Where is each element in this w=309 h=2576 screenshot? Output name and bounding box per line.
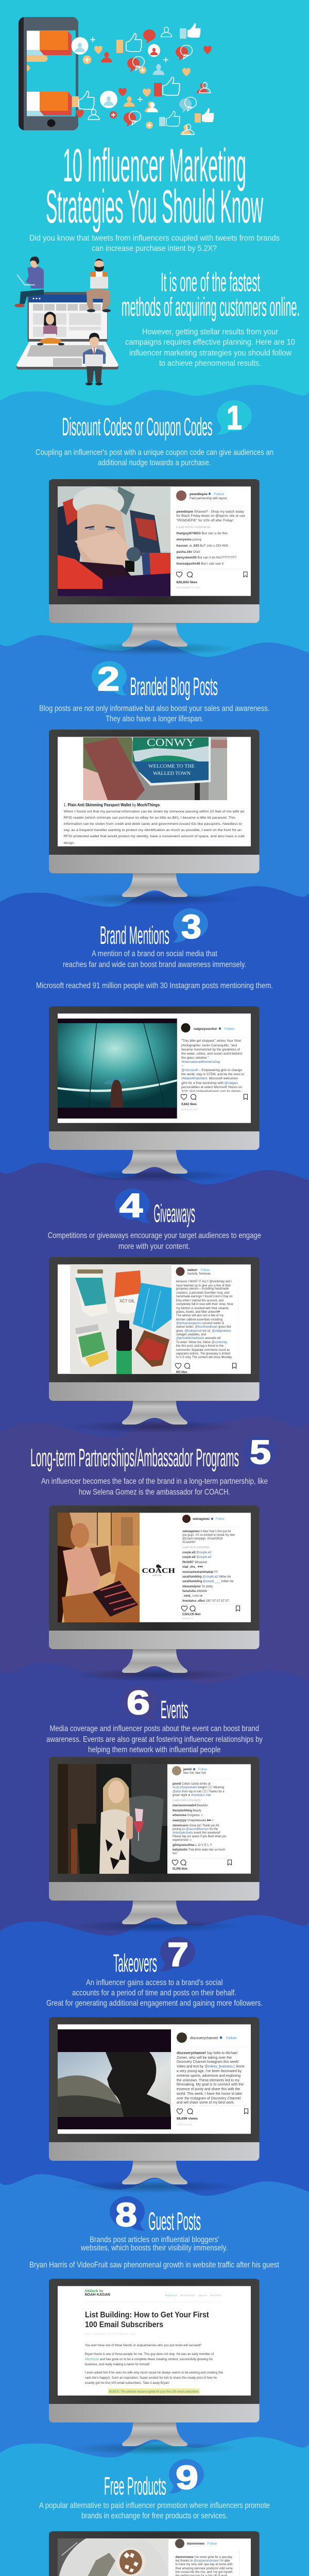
instagram panel: natgeoyourshot: #MakeWhatsNext. Microsoft welcomes — [181, 1077, 238, 1080]
instagram panel: giveaway: @artisanaorganics coconut butter & — [176, 1321, 225, 1325]
blog page header: NOAH KAGAN — [85, 2293, 110, 2297]
instagram panel: discoverychannel: extreme sports, adventure and exploring — [177, 2074, 241, 2078]
heading: brand mentions with number bubble: 3 — [181, 908, 201, 945]
instagram panel: pewdiepie: moryoms pussy — [176, 538, 202, 541]
instagram panel: pewdiepie: pasha.16x Osel — [176, 550, 200, 554]
instagram panel: giveaway: gorgeous pieces— including handmade — [176, 1287, 229, 1291]
monitor: conwy blog post — [49, 730, 260, 906]
instagram panel: discoverychannel: a very young age, I've been fascinated by — [177, 2070, 242, 2073]
instagram panel: selenagomez: fitriti97 Wowww — [182, 1561, 207, 1564]
instagram panel: pewdiepie: for Black Friday deals on @tayroc site or use — [176, 514, 245, 518]
blog article: LAST UPDATED ON OCTOBER 8, 2021 — [85, 2333, 136, 2336]
instagram panel: natgeoyourshot: personalities at select Microsoft Stores on — [181, 1086, 242, 1089]
heading: branded blog posts with number bubble: 2 — [97, 660, 119, 698]
instagram panel: diannnnneee: diannnnneee I've never gone for a spa day, — [176, 2555, 233, 2559]
instagram panel: selenagomez: hana2siita sbbbbbb — [182, 1589, 207, 1593]
blog article: I even asked him if he sees his wife very much cause he always seems to be working and creating (He — [85, 2371, 223, 2375]
instagram panel: discoverychannel: discoverychannel Say hello to Michael — [177, 2052, 237, 2055]
monitor: discovery channel post — [49, 2017, 260, 2193]
instagram panel: pewdiepie: "PEWDIEPIE" for 10% off after Friday! — [176, 519, 233, 522]
instagram panel: discoverychannel: Video and text by @mikey_business | Since — [177, 2065, 245, 2069]
instagram panel: diannnnneee: to have my very own spa day at home with — [176, 2563, 233, 2566]
instagram panel: jannid: #LULUSstylestudio tonight ☐☐ Wearing — [173, 1786, 224, 1789]
blog article: Bryan Harris is one of those people for me. This guy does not stop. He was an early member of — [85, 2352, 214, 2356]
photo: passport wallet and conwy sign: CONWY — [147, 736, 195, 749]
instagram panel: jannid: marciacoronado4 Beautiful — [173, 1804, 208, 1807]
instagram panel: jannid: 51,045 likes — [173, 1867, 187, 1871]
coach logo: ♞ — [154, 1564, 163, 1569]
blog article: business, and really making a name for himself. — [85, 2363, 150, 2366]
instagram panel: natgeoyourshot: girls for a free workshop with @natgeo — [181, 1081, 238, 1085]
blog page header: PODCAST — [165, 2294, 177, 2297]
text: takeovers description: An influencer gains access to a brand's social — [86, 1978, 222, 1987]
instagram panel: natgeoyourshot: 9,842 likes — [181, 1103, 197, 1106]
person: bearded man on top of the laptop — [87, 259, 111, 312]
instagram panel: jannid: @lulus from top to toe! ☐☐ Thanks for a — [173, 1790, 225, 1793]
blog article: List Building: How to Get Your First — [85, 2311, 209, 2319]
photo: pewdiepie with watch — [58, 486, 170, 596]
instagram panel: jannid: joining us @secondfloornyc for the — [172, 1827, 218, 1831]
instagram panel: jannid: Load more comments — [173, 1799, 201, 1802]
text: guest posts description: Brands post articles on influential bloggers' — [90, 2235, 219, 2244]
instagram panel: natgeoyourshot: -- — [181, 1064, 183, 1067]
instagram panel: giveaway: collagen peptides, and — [176, 1333, 206, 1336]
blog page header: UPDATES — [210, 2294, 221, 2297]
instagram panel: jannid: Please tag our space if you liked what you — [173, 1835, 226, 1838]
instagram panel: pewdiepie: 626,843 likes — [176, 581, 197, 584]
instagram panel: pewdiepie: Load more comments — [176, 526, 211, 529]
instagram panel: pewdiepie: daisysteen05 But can it do this???!?!?!?? — [176, 556, 236, 560]
instagram panel: giveaway: to U.S only. The contest will close Monday — [176, 1355, 232, 1359]
instagram panel: discoverychannel — [176, 2032, 249, 2126]
text: takeovers description: Great for generating additional engagement and gaining more followers. — [46, 1999, 263, 2008]
text: discount codes description — [36, 448, 273, 467]
photo: woman at lulus event — [58, 1764, 167, 1874]
instagram panel: selenagomez: selenagomez A New Year's first just for — [182, 1530, 231, 1533]
instagram panel: selenagomez: @Coach campaign. #Coach5518 — [182, 1537, 223, 1540]
instagram panel: diannnnneee — [175, 2539, 239, 2576]
illustration: people on a giant laptop — [14, 257, 118, 385]
panel: strategy 9 free products — [39, 2459, 270, 2576]
text: free products description: brands in exchange for free products or services. — [81, 2512, 228, 2520]
text: events description — [46, 1724, 263, 1754]
instagram panel: giveaway — [175, 1267, 239, 1374]
instagram panel: giveaway: my kitchen is stocked with their ceramic — [176, 1307, 229, 1310]
instagram panel: pewdiepie: thatguy874653 But can u do this — [176, 532, 228, 535]
instagram panel: selenagomez: sarahtumbling @cloudz____ follow me — [182, 1580, 234, 1583]
instagram panel: natgeoyourshot: photographer Justin Carrasquillo, "and — [181, 1044, 237, 1047]
instagram panel: jannid: stevencarro Great pic! Thank you for — [173, 1824, 220, 1827]
instagram panel: discoverychannel: Follow — [226, 2036, 237, 2040]
heading: long-term partnerships with number bubble: 5 — [250, 1433, 271, 1471]
photo: giveaway food products — [70, 1264, 171, 1374]
instagram panel: giveaway: Etsy when I started this account, and — [176, 1299, 224, 1302]
instagram panel: giveaway: @primalkitchenfoods avocado oil! — [176, 1336, 221, 1340]
heading: guest posts with number bubble: 8 — [115, 2196, 137, 2233]
blog article: You ever have one of those friends or acquaintances who you just know will succeed? — [85, 2344, 202, 2347]
blog page header: RESOURCES — [180, 2294, 195, 2297]
instagram panel: giveaway: because I WANT IT ALL!! @cordxclay and I — [176, 1280, 232, 1283]
heading: long-term partnerships with number bubble — [30, 1433, 278, 1472]
text: brand mentions description: reaches far and wide can boost brand awareness immensely. — [63, 960, 246, 969]
text: events description: Media coverage and influencer posts about the event can boost brand — [49, 1724, 259, 1733]
instagram panel: selenagomez: couple.al2 @couple.al2 — [182, 1555, 212, 1559]
instagram panel: pewdiepie: therealjax0n49 But I can see it — [176, 562, 224, 566]
text: planning paragraph: However, getting stellar results from your — [142, 328, 278, 336]
text: giveaways description: more with your content. — [118, 1242, 190, 1251]
instagram panel: discoverychannel: over the Instagram of Discovery Channel — [177, 2097, 241, 2100]
instagram panel: giveaway: have teamed up to give you a few of their — [176, 1284, 231, 1287]
instagram panel: diannnnneee: Follow — [208, 2542, 217, 2546]
blog page header: OkDork — [85, 2290, 98, 2293]
panel: strategy 4 giveaways — [48, 1187, 261, 1433]
instagram panel: diannnnneee: hot cocoa into the mix, and I've got myself — [176, 2570, 232, 2574]
heading: free products with number bubble: 9 — [176, 2459, 198, 2496]
text: planning paragraph: to achieve phenomenal results. — [159, 359, 261, 368]
heading: takeovers with number bubble: Takeovers — [113, 1950, 157, 1977]
text: partnerships description — [41, 1477, 268, 1497]
text: partnerships description: how Selena Gomez is the ambassador for COACH. — [79, 1488, 230, 1497]
heading: free products with number bubble — [104, 2459, 204, 2500]
instagram panel: diannnnneee: their amazing skincare products! Add some — [176, 2567, 233, 2570]
person: man sitting in front — [83, 333, 106, 385]
text: blog posts description — [39, 704, 270, 723]
instagram panel: giveaway: The winner will also win a few of my — [176, 1314, 224, 1317]
instagram panel: selenagomez: noooranheshamkhattab !!!!! — [182, 1570, 218, 1574]
panel: strategy 8 guest posts — [29, 2196, 280, 2455]
blog article text: information can be stolen from credit and debit cards and government-issued IDs like passports. Needless to — [64, 822, 242, 826]
coach logo: NEW YORK — [152, 1574, 163, 1577]
instagram panel: giveaway: To enter: follow me, follow @cordxclay, — [176, 1341, 228, 1344]
instagram panel: giveaway: Nashville, Tennessee — [187, 1272, 211, 1276]
text: brand mentions description: A mention of a brand on social media that — [92, 950, 218, 958]
heading: takeovers with number bubble — [113, 1936, 195, 1977]
heading: giveaways with number bubble — [115, 1187, 195, 1228]
panel: strategy 7 takeovers — [46, 1936, 263, 2193]
blog article: Monthly1k and has gone on to be a complete beast creating content, successfully growing his — [85, 2358, 213, 2361]
instagram panel: natgeoyourshot: MARCH 8, 2017 — [181, 1108, 198, 1111]
blog article text: 1. Plain Anti Skimming Passport Wallet by MochiThings: — [64, 803, 161, 807]
instagram panel: jannid: glimpsesofme L O V E L Y — [173, 1843, 213, 1847]
text: discount codes description: Coupling an influencer's post with a unique coupon code can give audiences an — [36, 448, 273, 457]
instagram panel: selenagomez: nikasaneipour So pretty . — [182, 1585, 214, 1588]
instagram panel: giveaway: coasters, a porcelain thumbler mug, and — [176, 1291, 229, 1295]
panel: strategy 5 long-term partnerships — [30, 1433, 278, 1682]
blog page header: by — [99, 2290, 104, 2293]
monitor: giveaway instagram post — [49, 1257, 260, 1433]
panel: strategy 6 events — [46, 1684, 263, 1933]
blog article text: RFID reader (which criminals can purchase on eBay for as little as $8!), I became a little bit paranoid. This — [64, 816, 235, 820]
instagram panel: giveaway: plates, bowls, and fiber artwork♥ — [176, 1310, 220, 1314]
photo: skincare on marble tray — [58, 2538, 168, 2576]
text: events description: awareness. Events are also great at fostering influencer relationships by — [46, 1735, 263, 1744]
panel: strategy 4 giveaways: Giveaways — [153, 1200, 195, 1228]
instagram panel: jannid: #lulustylestudio event this weekend! — [173, 1831, 220, 1835]
instagram panel: natgeoyourshot: natgeoyourshot — [194, 1027, 217, 1031]
instagram panel: discoverychannel: the unknown. These elements led to my — [177, 2079, 239, 2082]
blog article text: RFID protected wallet that would protect my identity, have a convenient amount of space, and also have a cute — [64, 835, 245, 838]
text: free products description — [39, 2501, 270, 2520]
instagram panel: pewdiepie — [176, 490, 247, 589]
instagram panel: selenagomez: JANUARY 2 — [182, 1617, 193, 1620]
instagram panel: pewdiepie: pewdiepie — [190, 493, 208, 496]
icons: likes, hearts, followers and comments — [71, 23, 214, 135]
instagram panel: jannid: fun! — [173, 1852, 177, 1855]
heading: discount codes with number bubble: 1 — [227, 399, 242, 436]
instagram panel: discoverychannel: Zomer, who will be taking over the — [177, 2056, 232, 2060]
intro text: Did you know that tweets from influencers coupled with tweets from brands — [29, 234, 280, 243]
heading: events with number bubble: 6 — [127, 1684, 150, 1721]
photo: passport wallet and conwy sign: WALLED TOWN — [153, 771, 191, 776]
instagram panel: selenagomez: selenagomez — [193, 1517, 210, 1521]
instagram panel: giveaway: comments! Separate comments count as — [176, 1348, 230, 1352]
instagram panel: jannid: great night ● #lovelulus #ad — [173, 1793, 211, 1797]
text: partnerships description: An influencer becomes the face of the brand in a long-term partnership, like — [41, 1477, 268, 1486]
blog article: exactly got his first 100 email subscribers. Take it away Bryan! — [85, 2381, 169, 2385]
blog article text: say, as a frequent traveller wanting to protect my identification as much as possible, I went on the hunt for an — [64, 828, 242, 832]
instagram panel: giveaway: like this post, and tag a friend in the — [176, 1344, 224, 1348]
blog article text: When I found out that my personal information can be stolen by someone passing within 10 feet of me with an — [64, 810, 245, 814]
coach logo — [142, 1564, 175, 1577]
instagram panel: discoverychannel: 7 DAYS AGO — [177, 2123, 192, 2126]
instagram panel: selenagomez: Load more comments — [182, 1546, 210, 1549]
instagram panel: jannid: saazyyyy Очаровашка ♣♣☺ — [173, 1819, 214, 1822]
blog page header — [85, 2290, 222, 2302]
instagram panel: jannid: Follow — [198, 1768, 207, 1771]
illustration: phone with social icons — [19, 17, 214, 135]
instagram panel: natgeoyourshot: became mesmerized by the greatness of — [181, 1048, 240, 1052]
instagram panel: jannid: thestylishthing Beauty — [173, 1809, 202, 1812]
instagram panel: pewdiepie: NOVEMBER 24, 2017 — [176, 586, 200, 589]
text: blog posts description: They also have a longer lifespan. — [106, 715, 203, 723]
instagram panel: giveaway: Follow — [201, 1268, 210, 1272]
photo: giveaway food products: XCT OIL — [119, 1299, 135, 1303]
person: man with laptop on the left — [14, 257, 44, 307]
instagram panel: selenagomez: fenerbahce_effect 1907 GT GT GT GT — [182, 1599, 229, 1603]
text: free products description: A popular alternative to paid influencer promotion where influencers promote — [39, 2501, 270, 2510]
instagram panel: selenagomez: _vanq_ Love u♦ — [182, 1594, 203, 1598]
text: guest posts description: websites, which boosts their visibility immensely. — [80, 2244, 228, 2252]
instagram panel: giveaway: completely fell in love with their shop. Now — [176, 1302, 233, 1306]
blog article text — [64, 803, 245, 845]
instagram panel: diannnnneee: diannnnneee — [187, 2542, 204, 2546]
instagram panel: selenagomez — [181, 1515, 240, 1620]
instagram panel: giveaway: kitchen cabinet essentials including — [176, 1318, 222, 1321]
heading: events with number bubble — [122, 1684, 188, 1724]
instagram panel: jannid: jannid Cotton candy drinks at — [172, 1782, 211, 1786]
text: brand mentions description — [36, 950, 273, 990]
instagram panel: natgeoyourshot: @microsoft – Empowering girls to change — [181, 1069, 242, 1072]
instagram panel: natgeoyourshot: "This little girl stopped," writes Your Shot — [181, 1039, 241, 1043]
instagram panel: selenagomez: 5,024,135 likes — [182, 1613, 201, 1616]
instagram panel: jannid — [172, 1766, 232, 1871]
instagram panel: jannid: New York, New York — [183, 1771, 207, 1775]
panel: strategy 3 brand mentions — [36, 908, 273, 1182]
instagram panel: discoverychannel: discoverychannel — [190, 2036, 218, 2040]
monitor: selena gomez coach post — [49, 1505, 260, 1682]
blog article: said she's happy!). Such an inspiration. Super excited for him to share this meaty post of how he — [85, 2376, 217, 2380]
instagram panel: jannid: jannid — [183, 1768, 192, 1771]
instagram panel: natgeoyourshot: the glass window." — [181, 1056, 209, 1060]
instagram panel: pewdiepie: pewdiepie Shaved? - Shop my watch today — [176, 510, 245, 514]
instagram panel: selenagomez: couple.al2 @couple.al2 — [182, 1551, 212, 1554]
blog article: BONUS: The ultimate resource guide for your first 100 email subscribers — [109, 2390, 199, 2394]
text: planning paragraph: influencer marketing strategies you should follow — [129, 349, 292, 358]
instagram panel: pewdiepie: Paid partnership with tayroc — [190, 497, 228, 500]
instagram panel: diannnnneee: but thanks to @copperandcrane I'm able — [176, 2559, 230, 2563]
photo: selena gomez with coach bag — [58, 1513, 140, 1622]
instagram panel: giveaway: walnut butter, @fourthandheart grass-fed — [176, 1325, 231, 1329]
heading: takeovers with number bubble: 7 — [167, 1936, 188, 1973]
text: planning paragraph: campaigns requires effective planning. Here are 10 — [125, 338, 295, 347]
photo: boy silhouette at sunset — [58, 2029, 171, 2129]
monitor: pewdiepie instagram post — [49, 479, 260, 655]
blog page header: ABOUT — [198, 2294, 207, 2297]
laptop — [16, 292, 118, 369]
instagram panel: giveaway: separates entries. The giveaway is limited — [176, 1352, 230, 1355]
instagram panel: pewdiepie: Follow — [214, 493, 224, 496]
text: events description: helping them network with influential people — [88, 1745, 221, 1754]
heading: discount codes with number bubble — [62, 399, 252, 441]
text: blog posts description: Blog posts are not only informative but also boost your sales and awareness. — [39, 704, 270, 713]
text: takeovers description — [46, 1978, 263, 2008]
panel: strategy 8 guest posts: Guest Posts — [148, 2208, 201, 2235]
text: guest posts description — [29, 2235, 280, 2269]
heading: brand mentions with number bubble — [100, 908, 208, 950]
blog article: 100 Email Subscribers — [85, 2320, 163, 2329]
instagram panel: giveaway: leeborr — [187, 1268, 198, 1272]
text: giveaways description — [48, 1231, 261, 1251]
instagram panel: natgeoyourshot: 3/18. Visit makewhatsnext.com for details. — [181, 1090, 242, 1093]
instagram panel: giveaway: ghee, @bulletproof xct oil, @vitalproteins — [176, 1329, 231, 1333]
instagram panel: giveaway: 601 likes — [176, 1370, 187, 1374]
instagram panel: jannid: kellydonlin That drink looks like so much — [173, 1848, 225, 1852]
instagram panel: natgeoyourshot — [181, 1023, 248, 1111]
heading: branded blog posts with number bubble — [92, 660, 218, 701]
heading: free products with number bubble: Free Products — [104, 2472, 166, 2500]
instagram panel: discoverychannel: and will share some of my best work. — [177, 2101, 234, 2105]
text: giveaways description: Competitions or giveaways encourage your target audiences to engage — [48, 1231, 261, 1240]
photo: passport wallet and conwy sign: WELCOME TO THE — [148, 764, 195, 769]
person: woman sitting cross-legged — [37, 312, 64, 345]
instagram panel: discoverychannel: Discovery Channel Instagram this week! — [177, 2060, 239, 2064]
instagram panel: jannid: experienced ☺ — [173, 1838, 192, 1842]
monitor: okdork guest post — [49, 2279, 260, 2455]
intro text — [29, 234, 280, 253]
instagram panel: selenagomez: #CoachNY — [182, 1540, 196, 1544]
coach logo: COACH — [142, 1567, 175, 1575]
text: brand mentions description: Microsoft reached 91 million people with 30 Instagram posts mentioning them. — [36, 981, 273, 990]
instagram panel: natgeoyourshot: Follow — [225, 1027, 234, 1031]
instagram panel: giveaway: handmade earrings! I found Cord x Clay on — [176, 1295, 233, 1298]
intro text: can increase purchase intent by 5.2X? — [92, 244, 217, 253]
panel: strategy 1 discount codes — [36, 399, 273, 655]
instagram panel: selenagomez: vlad_vhs_ ♥♥♥ — [182, 1565, 203, 1569]
text: planning paragraph — [125, 328, 295, 368]
blog article — [85, 2311, 223, 2394]
monitor: jannid instagram post — [49, 1757, 260, 1933]
instagram panel: selenagomez: Follow — [216, 1517, 225, 1521]
instagram panel: natgeoyourshot: #InternationalWomensDay — [181, 1060, 220, 1064]
instagram panel: pewdiepie: hassan_n_243 BuT cAn u DO tHiS — [176, 544, 228, 548]
panel: strategy 2 branded blog posts — [39, 660, 270, 906]
heading: giveaways with number bubble: 4 — [119, 1187, 143, 1224]
heading: brand mentions with number bubble: Brand Mentions — [100, 922, 169, 950]
photo: girl at the aquarium — [58, 1019, 177, 1118]
instagram panel: discoverychannel: essence of purity and share this with the — [177, 2088, 240, 2091]
instagram panel: discoverychannel: filmmaking. My goal is to connect with the — [177, 2083, 244, 2087]
text: discount codes description: additional nudge towards a purchase. — [98, 459, 211, 467]
instagram panel: selenagomez: sarahtumbling @couple.al2 follow me — [182, 1575, 231, 1579]
monitor: national geographic post — [49, 1006, 260, 1182]
instagram panel: selenagomez: you guys- I'm so excited to reveal my new — [182, 1533, 235, 1537]
instagram panel: jannid: whereslea Gorgeous ☺ — [172, 1814, 203, 1817]
instagram panel: discoverychannel: 88,699 views — [177, 2117, 198, 2121]
heading: guest posts with number bubble — [110, 2196, 201, 2235]
title — [46, 140, 263, 233]
monitor: copper and crane post — [49, 2531, 260, 2576]
instagram panel: discoverychannel: world. This week, I have the honor to take — [176, 2092, 242, 2096]
instagram panel: natgeoyourshot: the water, colors, and ocean world behind — [181, 1052, 242, 1056]
photo: passport wallet and conwy sign — [83, 736, 227, 800]
heading: fastest methods — [122, 267, 300, 321]
text: takeovers description: accounts for a period of time and posts on their behalf. — [72, 1989, 236, 1997]
blog article text: design. — [64, 841, 75, 845]
icon: smartphone — [19, 17, 78, 130]
instagram panel: natgeoyourshot: the world, stay in STEM, and be the ones to — [181, 1073, 244, 1076]
panel: strategy 6 events: Events — [161, 1696, 188, 1724]
